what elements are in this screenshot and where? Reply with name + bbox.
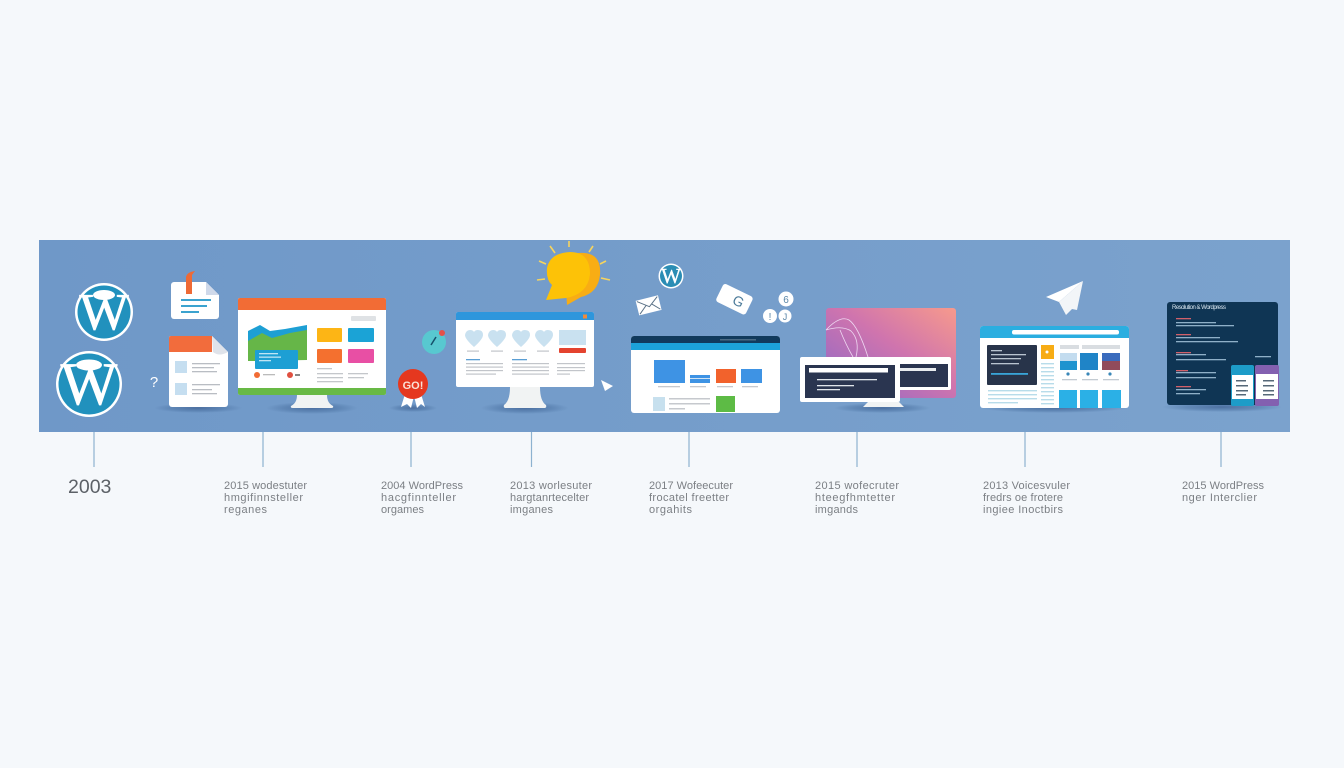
icon: small circles: J <box>783 312 787 322</box>
label: milestone 3 <box>381 480 464 516</box>
label: milestone 2: 2015 wodestuter <box>224 480 307 492</box>
icon: cursor arrow <box>601 380 613 391</box>
label: milestone 7: fredrs oe frotere <box>983 492 1063 504</box>
icon: browser window with dark panel <box>980 326 1129 413</box>
label: milestone 4: hargtanrtecelter <box>510 492 589 504</box>
icon: paper plane <box>1046 281 1083 315</box>
label: milestone 5: 2017 Wofeecuter <box>649 480 733 492</box>
label: milestone 6 <box>815 480 899 516</box>
label: milestone 4 <box>510 480 592 516</box>
icon: teal clock <box>422 330 446 354</box>
icon: small circles: ! <box>769 312 771 323</box>
label: milestone 7 <box>983 480 1070 516</box>
icon: monitor with hearts <box>456 312 594 414</box>
icon: note with ribbon <box>171 271 219 319</box>
label: 2003: 2003 <box>68 476 111 498</box>
icon: dark code panel with phones: Resolution & Wordpress <box>1172 305 1226 311</box>
icon: document <box>154 336 242 413</box>
timeline band <box>39 240 1290 432</box>
icon: small circles <box>763 292 794 323</box>
connector lines <box>94 432 1221 467</box>
label: milestone 6: 2015 wofecruter <box>815 480 899 492</box>
label: milestone 7: ingiee Inoctbirs <box>983 504 1064 516</box>
icon: monitor with dashboard <box>238 298 386 414</box>
label: milestone 6: hteegfhmtetter <box>815 492 895 504</box>
icon: small WordPress logo: W <box>661 264 681 288</box>
label: milestone 3: orgames <box>381 504 424 516</box>
label: milestone 2: hmgifinnsteller <box>224 492 303 504</box>
label: milestone 2: reganes <box>224 504 268 516</box>
label: milestone 7: 2013 Voicesvuler <box>983 480 1070 492</box>
icon: envelope <box>636 295 662 315</box>
icon: red badge: GO! <box>403 380 423 392</box>
icon: G card: G <box>730 292 747 311</box>
icon: gradient panel with monitors <box>800 308 956 413</box>
icon: dark code panel with phones <box>1162 302 1282 412</box>
label: milestone 8 <box>1182 480 1264 504</box>
label: milestone 3: hacgfinnteller <box>381 492 456 504</box>
label: milestone 5 <box>649 480 733 516</box>
label: milestone 4: 2013 worlesuter <box>510 480 592 492</box>
icon: question mark: ? <box>150 374 158 391</box>
label: milestone 3: 2004 WordPress <box>381 480 464 492</box>
label: milestone 8: nger Interclier <box>1182 492 1257 504</box>
label: milestone 4: imganes <box>510 504 554 516</box>
icon: WordPress logo lower: W <box>61 351 118 417</box>
icon: small circles: 6 <box>783 295 789 306</box>
icon: G card <box>715 283 754 315</box>
label: milestone 6: imgands <box>815 504 858 516</box>
icon: browser window with blocks <box>631 336 780 413</box>
label: milestone 2 <box>224 480 307 516</box>
icon: yellow speech bubbles with sun rays <box>537 241 610 305</box>
icon: WordPress logo upper: W <box>79 284 129 341</box>
label: milestone 8: 2015 WordPress <box>1182 480 1264 492</box>
label: milestone 5: orgahits <box>649 504 692 516</box>
icon: red badge <box>389 369 437 412</box>
label: milestone 5: frocatel freetter <box>649 492 729 504</box>
